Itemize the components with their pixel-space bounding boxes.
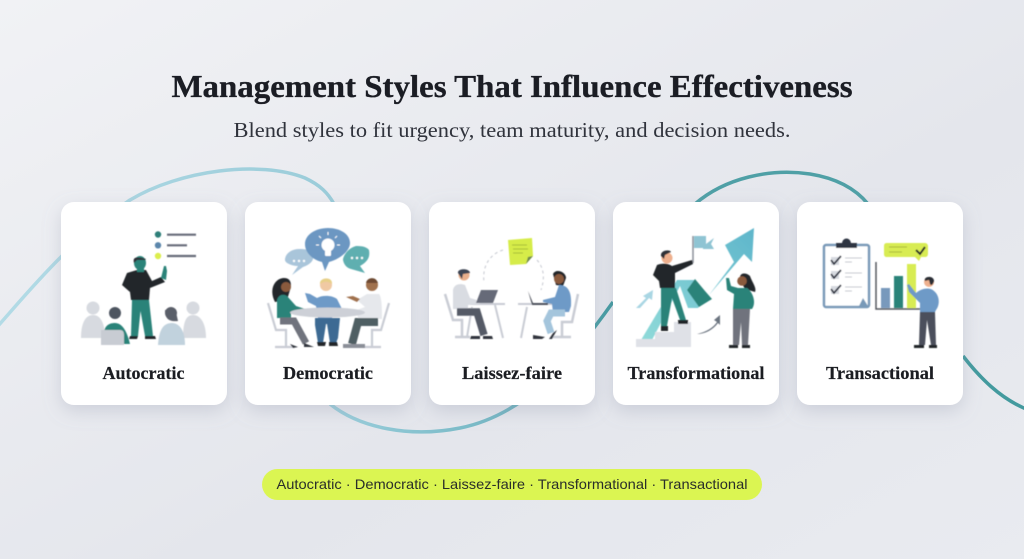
bar chart — [876, 262, 922, 309]
list bullets — [155, 231, 196, 259]
label: Democratic — [283, 363, 373, 383]
panel: Transformational — [613, 202, 779, 405]
right worker — [528, 271, 578, 339]
left worker — [445, 269, 498, 339]
man with flag — [653, 250, 693, 331]
big arrow — [641, 228, 754, 340]
man — [907, 277, 939, 348]
small arrows — [636, 290, 653, 308]
panel: Democratic — [245, 202, 411, 405]
panel: Autocratic — [61, 202, 227, 405]
woman — [272, 278, 314, 348]
label: Transactional — [826, 363, 934, 383]
curve: right teal wave — [963, 356, 1024, 409]
curve: left light blue wave — [0, 169, 334, 326]
legend pill — [262, 469, 762, 500]
icon: checklist and chart — [824, 238, 939, 348]
audience back — [81, 302, 206, 338]
blonde man — [305, 278, 342, 346]
icon: presenter with audience — [81, 231, 206, 345]
sticky note — [508, 238, 533, 265]
icon: growth arrow with people — [636, 228, 755, 348]
callout check — [884, 243, 928, 261]
label: Autocratic — [102, 363, 185, 383]
presenter — [122, 256, 167, 339]
icon: team at round table — [268, 228, 389, 348]
flag — [692, 236, 694, 263]
label: Transformational — [628, 363, 764, 383]
label: Laissez-faire — [462, 363, 562, 383]
clipboard — [824, 238, 869, 307]
table — [290, 308, 365, 318]
chairs — [268, 303, 389, 347]
woman pointing — [726, 274, 755, 348]
panel: Transactional — [797, 202, 963, 405]
speech bubbles — [285, 228, 369, 275]
dashed arcs — [484, 250, 543, 290]
desks — [467, 304, 558, 338]
stairs — [636, 322, 691, 347]
curve: centre wave — [330, 302, 613, 432]
icon: remote workers with sticky note — [445, 238, 578, 339]
title: Management Styles That Influence Effectiveness — [172, 68, 852, 104]
seated listeners — [101, 307, 185, 345]
subtitle: Blend styles to fit urgency, team maturity, and decision needs. — [234, 118, 790, 142]
panel: Laissez-faire — [429, 202, 595, 405]
curve: top right teal wave — [695, 172, 868, 204]
man right — [343, 278, 382, 348]
legend text: Autocratic · Democratic · Laissez-faire · Transformational · Transactional — [276, 476, 748, 492]
